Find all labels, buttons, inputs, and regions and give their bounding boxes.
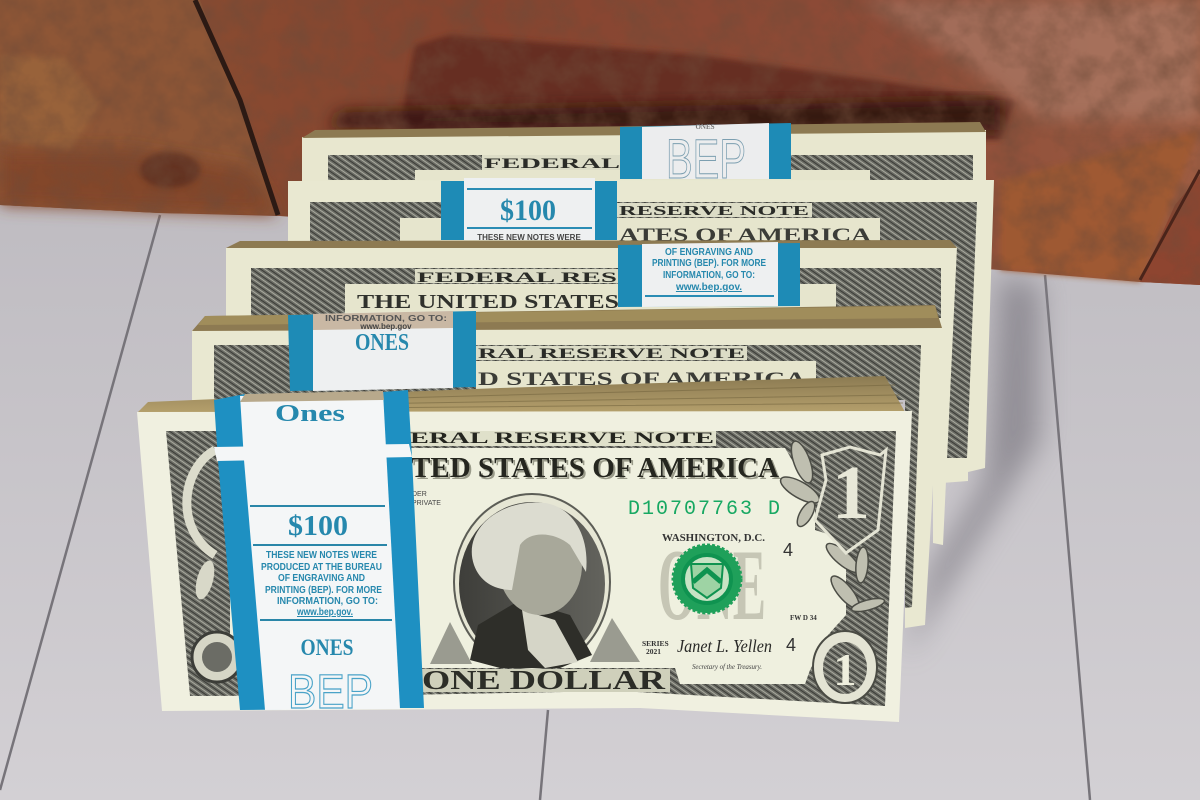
bill stack 2: RAL RESERVE NOTE — [478, 346, 745, 362]
bill stack 2 — [192, 305, 942, 628]
cream centre — [230, 448, 846, 684]
front bill: 2021 — [646, 647, 661, 656]
bill stack 3: FEDERAL RES — [417, 270, 617, 286]
bill stack 4: RESERVE NOTE — [619, 204, 809, 219]
back band: ONES — [695, 123, 715, 131]
front stack edge — [137, 376, 905, 413]
bottom right seal — [813, 631, 877, 703]
front bill: ONE — [658, 529, 766, 642]
front bill — [137, 411, 912, 722]
band: THESE NEW NOTES WERE — [477, 233, 581, 242]
front band: BEP — [288, 666, 373, 719]
band: ONES — [355, 330, 409, 356]
back band — [620, 123, 791, 190]
front bill: Janet L. Yellen — [677, 636, 772, 656]
top banner — [408, 430, 716, 447]
engraved frame — [166, 431, 896, 706]
heading: TED STATES OF AMERICA — [411, 453, 780, 484]
bottom right seal: 1 — [834, 644, 856, 695]
heading: TED STATES OF AMERICA — [413, 455, 782, 486]
bill stack 3: THE UNITED STATES — [357, 291, 619, 313]
front bill: Secretary of the Treasury. — [692, 663, 762, 671]
bill stack 5 (back): FEDERAL — [484, 156, 620, 172]
green seal — [673, 545, 741, 613]
bill stack 5 (back) — [302, 122, 986, 190]
bill stack 3 — [226, 240, 957, 545]
one dollar banner: ONE DOLLAR — [422, 665, 666, 695]
rock mottling — [0, 0, 1200, 290]
top banner: ERAL RESERVE NOTE — [410, 430, 714, 447]
front bill: 4 — [786, 635, 796, 655]
right numeral shield — [815, 447, 886, 553]
front bill: PRIVATE — [412, 500, 441, 507]
front band: $100 — [288, 510, 348, 542]
right numeral shield: 1 — [832, 451, 870, 535]
front bill: WASHINGTON, D.C. — [662, 532, 765, 544]
band: INFORMATION, GO TO: — [663, 270, 755, 281]
band: PRINTING (BEP). FOR MORE — [652, 258, 766, 269]
front bill: FW D 34 — [790, 614, 817, 622]
bill stack 4: ATES OF AMERICA — [619, 225, 871, 246]
front band: OF ENGRAVING AND — [278, 573, 365, 584]
serial number: D10707763 D — [628, 498, 780, 521]
band — [618, 242, 800, 307]
portrait — [430, 494, 640, 670]
front band: PRODUCED AT THE BUREAU — [261, 562, 382, 573]
band — [288, 311, 476, 391]
series and signature: SERIES — [642, 639, 669, 648]
leaves right — [777, 439, 886, 614]
bill stack 4 — [288, 178, 994, 483]
band: www.bep.gov. — [675, 282, 742, 293]
front band: INFORMATION, GO TO: — [277, 596, 378, 607]
front bill: 4 — [783, 540, 793, 560]
band: INFORMATION, GO TO: — [325, 314, 447, 323]
band: www.bep.gov — [359, 322, 412, 331]
small text: DER — [412, 491, 427, 498]
band: OF ENGRAVING AND — [665, 247, 753, 258]
bill stack 2: D STATES OF AMERICA — [478, 369, 806, 390]
front band: Ones — [275, 401, 345, 427]
left engraving ornaments — [187, 450, 242, 682]
front band — [214, 390, 424, 719]
front band: ONES — [300, 635, 354, 660]
rock wall — [0, 0, 1200, 290]
band — [441, 178, 617, 242]
front band: PRINTING (BEP). FOR MORE — [265, 585, 382, 596]
front band: www.bep.gov. — [296, 607, 353, 618]
front band: THESE NEW NOTES WERE — [266, 550, 377, 561]
back band: BEP — [666, 127, 746, 190]
band: $100 — [500, 194, 556, 227]
